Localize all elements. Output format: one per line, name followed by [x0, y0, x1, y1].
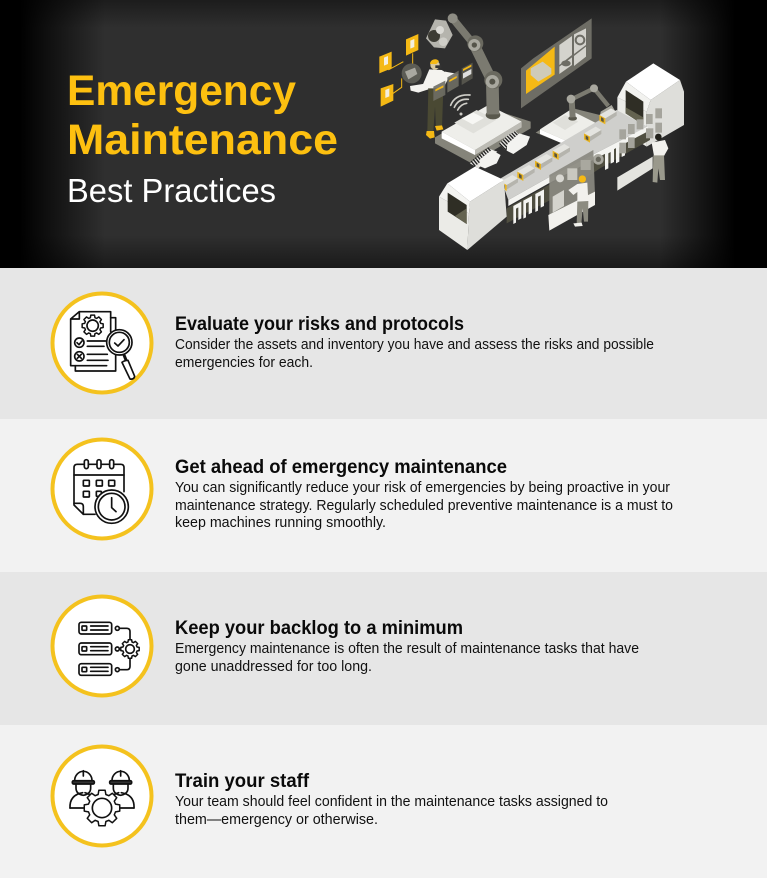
right side display and worker — [617, 108, 668, 191]
icon: checklist with magnifier — [52, 294, 152, 392]
heading: Evaluate your risks and protocols — [175, 314, 464, 335]
left housing — [439, 167, 507, 250]
title — [67, 67, 338, 164]
subtitle: Best Practices — [67, 172, 276, 209]
body text — [175, 337, 654, 371]
body text: emergencies for each. — [175, 355, 313, 371]
yellow tags and links — [379, 34, 422, 107]
icon: task list and gear — [52, 596, 152, 696]
products on conveyor — [501, 108, 617, 191]
wifi symbol — [451, 95, 470, 115]
body text — [175, 641, 639, 675]
robot arm two — [536, 84, 616, 147]
title: Maintenance — [67, 116, 338, 164]
title: Emergency — [67, 67, 296, 115]
header background — [0, 0, 767, 268]
body text: gone unaddressed for too long. — [175, 659, 372, 675]
body text: keep machines running smoothly. — [175, 515, 386, 531]
body text — [175, 794, 608, 828]
panel: train staff — [0, 725, 767, 878]
illustration: automated factory line — [379, 13, 684, 250]
icon: calendar with clock — [52, 440, 152, 538]
worker with holographic display — [410, 59, 473, 139]
body text: maintenance strategy. Regularly scheduled preventive maintenance is a must to — [175, 498, 673, 514]
body text: Emergency maintenance is often the result of maintenance tasks that have — [175, 641, 639, 657]
body text: Consider the assets and inventory you have and assess the risks and possible — [175, 337, 654, 353]
body text — [175, 480, 673, 531]
right housing — [617, 63, 684, 147]
body text: You can significantly reduce your risk of emergencies by being proactive in your — [175, 480, 670, 496]
conveyor belt — [501, 110, 650, 224]
body text: Your team should feel confident in the maintenance tasks assigned to — [175, 794, 608, 810]
panel: backlog — [0, 572, 767, 725]
operator panel and worker — [548, 150, 595, 231]
icon: workers and gear — [52, 746, 152, 846]
tablet panel — [521, 18, 592, 108]
panel: evaluate risks — [0, 268, 767, 419]
heading: Train your staff — [175, 771, 310, 792]
heading: Get ahead of emergency maintenance — [175, 457, 507, 478]
body text: them—emergency or otherwise. — [175, 812, 378, 828]
heading: Keep your backlog to a minimum — [175, 618, 463, 639]
panel: get ahead — [0, 419, 767, 572]
robot arm one — [426, 13, 531, 168]
